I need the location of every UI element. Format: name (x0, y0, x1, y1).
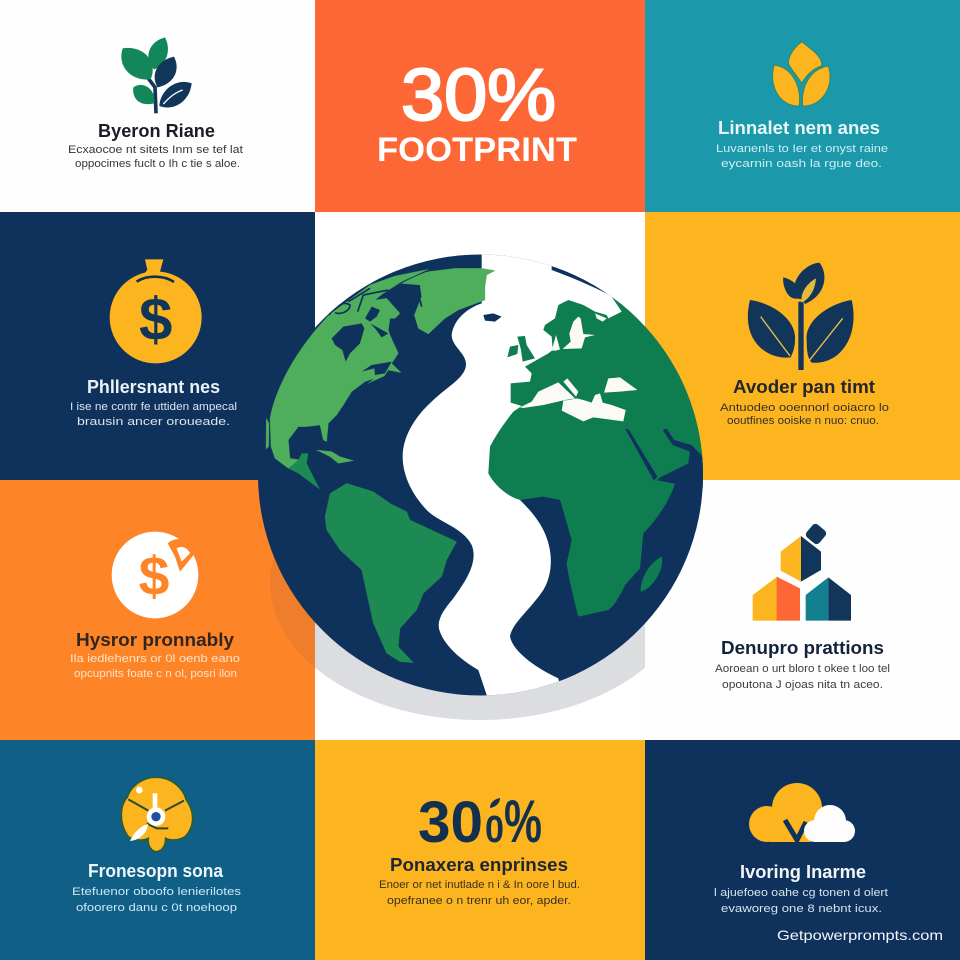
panel: center white (315, 212, 645, 740)
icon: money bag: $ (139, 286, 172, 353)
text block: Enoer or net inutlade n i & In oore l bud. (379, 879, 580, 891)
heading: Ivoring Inarme (740, 862, 866, 882)
central america (288, 453, 320, 489)
heading: FOOTPRINT (377, 131, 577, 169)
text block (379, 879, 580, 907)
icon: geometric houses (753, 522, 851, 621)
north america and greenland (266, 268, 495, 489)
text block: I ise ne contr fe uttiden ampecal (70, 401, 237, 413)
big statistic: 0 (485, 809, 504, 851)
text block (720, 402, 889, 427)
panel: bottom left (0, 740, 315, 960)
big statistic: 30 (418, 790, 483, 855)
red sea and persian gulf (625, 428, 707, 490)
text block: oppocimes fuclt o Ih c tie s aloe. (75, 158, 240, 170)
text block: l ajuefoeo oahe cg tonen d olert (714, 887, 888, 899)
icon: money bag (110, 259, 202, 363)
panel: left orange (0, 480, 315, 740)
text block (715, 663, 890, 691)
big statistic: % (504, 788, 542, 855)
south america (325, 483, 457, 663)
icon: clouds (749, 783, 855, 842)
text block: Ecxaocoe nt sitets Inm se tef lat (68, 144, 243, 156)
panel: right white (645, 480, 960, 740)
mediterranean, black sea and baltic (520, 313, 637, 421)
panel: bottom center (315, 740, 645, 960)
heading: Phllersnant nes (87, 377, 220, 397)
heading: Ponaxera enprinses (390, 855, 568, 875)
watermark: Getpowerprompts.com (777, 927, 943, 943)
left orange panel content (70, 532, 240, 680)
text block: Ila iedlehenrs or 0l oenb eano (70, 653, 240, 665)
text block (70, 653, 240, 680)
heading: Hysror pronnably (76, 630, 234, 650)
text block: opcupnits foate c n ol, posri ilon (74, 668, 237, 680)
text block: Antuodeo ooennorl ooiacro lo (720, 402, 889, 414)
panel: left navy (0, 212, 315, 480)
text block (72, 886, 242, 914)
heading: Avoder pan timt (733, 377, 875, 397)
heading: Byeron Riane (98, 121, 215, 141)
text block (716, 143, 888, 170)
british isles (507, 336, 535, 362)
big statistic (418, 788, 542, 855)
text block: eycarnin oash la rgue deo. (721, 158, 882, 170)
big statistic: 30% (401, 55, 556, 136)
hudson bay and arctic channels (332, 307, 392, 375)
ocean (258, 254, 703, 696)
icon: flower (121, 777, 193, 852)
text block: opoutona J ojoas nita tn aceo. (722, 679, 883, 691)
heading: Fronesopn sona (88, 861, 224, 881)
panel: right yellow (645, 212, 960, 480)
madagascar (641, 557, 662, 592)
icon: sprout (748, 263, 854, 370)
text block: Luvanenls to Ier et onyst raine (716, 143, 888, 155)
africa and eurasia (483, 297, 720, 617)
panel: top left (0, 0, 315, 212)
text block: ofoorero danu c 0t noehoop (76, 902, 237, 914)
heading: Denupro prattions (721, 638, 884, 658)
text block (70, 401, 237, 428)
text block: evaworeg one 8 nebnt icux. (721, 903, 882, 915)
globe (258, 247, 720, 700)
text block (68, 144, 243, 170)
icon: yellow tulip (773, 42, 830, 106)
text block: brausin ancer oroueade. (77, 416, 230, 428)
text block (714, 887, 888, 915)
text block: ooutfines ooiske n nuo: cnuo. (727, 415, 879, 427)
text block: Etefuenor oboofo lenierilotes (72, 886, 242, 898)
iceland (483, 313, 502, 322)
globe shadow (270, 558, 645, 720)
panel: top right (645, 0, 960, 212)
icon: dollar coin with tag: $ (139, 545, 169, 607)
icon: plant with leaves (121, 37, 192, 113)
white gap (403, 247, 628, 700)
text block: Aoroean o urt bloro t okee t loo tel (715, 663, 890, 675)
panel: bottom right (645, 740, 960, 960)
heading: Linnalet nem anes (718, 118, 880, 138)
icon: dollar coin with tag (112, 532, 198, 618)
text block: opefranee o n trenr uh eor, apder. (387, 895, 571, 907)
panel: top center 30% footprint (315, 0, 645, 212)
